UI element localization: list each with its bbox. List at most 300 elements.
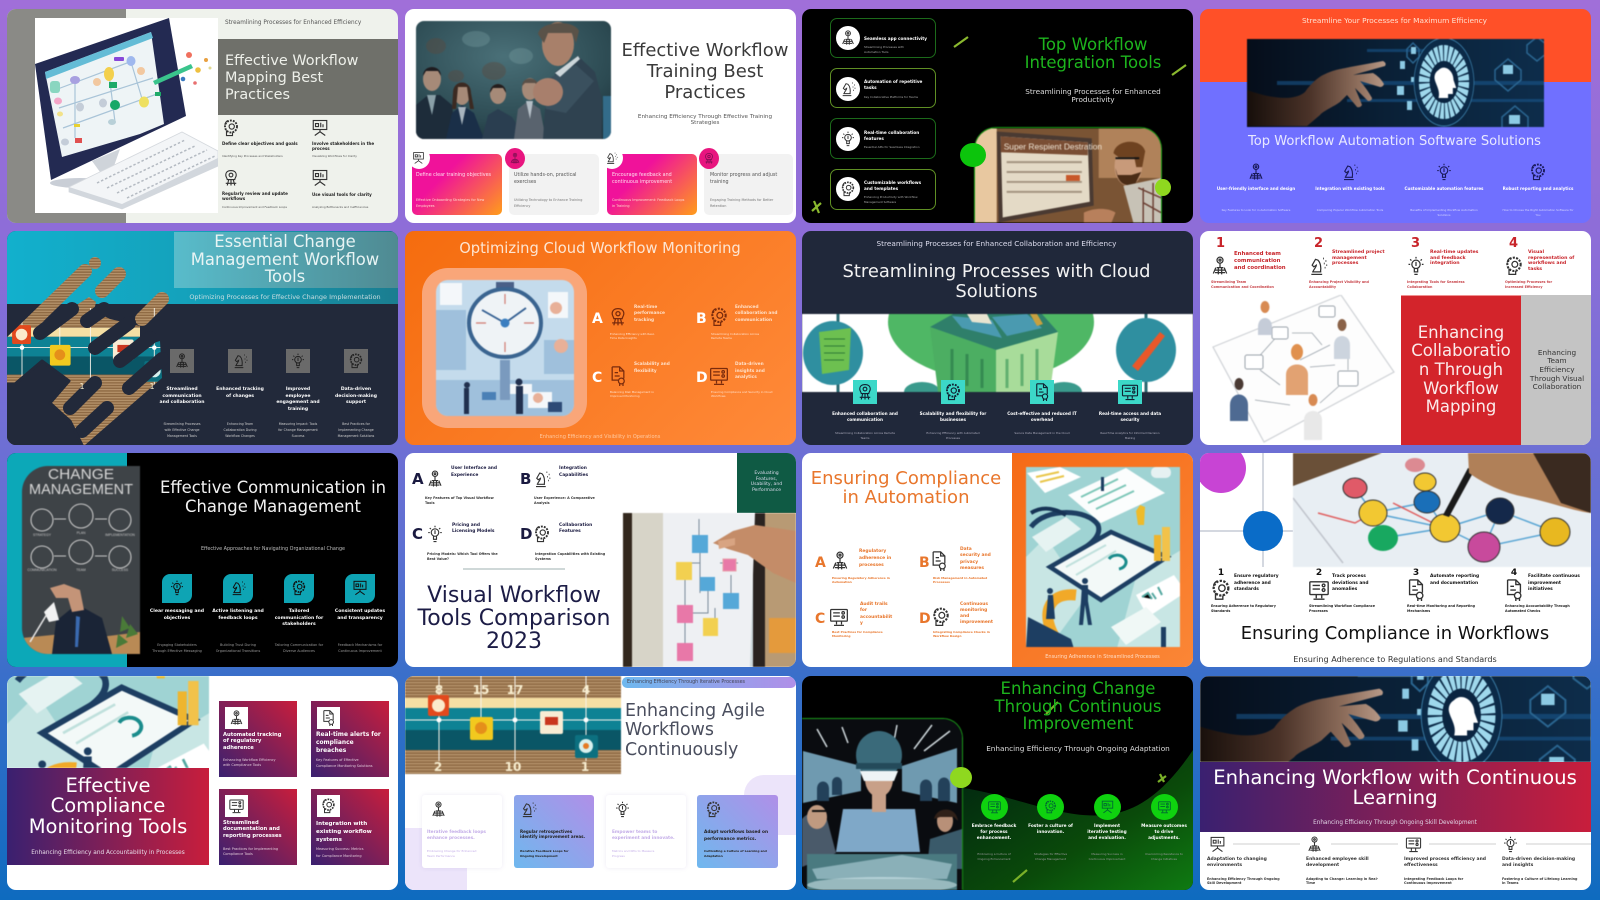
text: Measuring Success: Metrics	[316, 847, 364, 851]
icon: updates	[1406, 256, 1426, 276]
heading: communication: communication	[162, 394, 202, 398]
number 1: 1	[1218, 568, 1224, 578]
text: Iterative Feedback Loops for	[520, 849, 569, 853]
text: connectivity: Automation Tools	[864, 50, 888, 54]
text: stakeholders: Visualizing Workflows for Clarity	[312, 154, 357, 158]
icon: tailored	[284, 574, 314, 603]
gray side band	[7, 9, 126, 223]
text: Team Performance	[427, 854, 455, 858]
heading: feedback: Embrace feedback	[972, 824, 1016, 829]
letter A: A	[815, 555, 826, 571]
text: communication: Communication and Coordination	[1211, 284, 1274, 288]
text: efficiency: Integrating Feedback Loops for	[1404, 876, 1463, 880]
heading: cost: Cost-effective and reduced IT	[1007, 411, 1077, 416]
title: Integration Tools	[1025, 53, 1161, 72]
heading: outcomes: adjustments.	[1148, 836, 1180, 841]
text: customizable: Benefits of Implementing Workflow Automation	[1410, 208, 1478, 212]
icon: improvement	[1503, 579, 1525, 601]
text: Continuous Improvement: Feedback Loops	[612, 198, 684, 202]
text: messaging: Through Effective Messaging	[152, 649, 202, 653]
heading: security: security	[1120, 417, 1140, 422]
squiggle accent	[802, 676, 1193, 890]
panel: Enhancing Workflow with Continuous Learning	[1200, 676, 1591, 890]
illustration: timeline with tiles: 10	[505, 760, 521, 774]
heading: messaging	[147, 609, 207, 622]
heading	[427, 830, 486, 842]
photo: hand touching interface	[1200, 676, 1591, 762]
title: Enhancing Change	[1001, 679, 1155, 698]
text: updates	[330, 642, 390, 654]
heading: deviations: anomalies	[1332, 587, 1357, 592]
icon: communication	[170, 349, 194, 373]
illustration: workflow on a monitor	[35, 18, 218, 213]
card: monitor progress	[704, 154, 793, 215]
text: scalability	[903, 430, 1003, 440]
photo: change management chalkboard: PLAN	[77, 531, 86, 535]
text: collaboration	[535, 552, 605, 562]
text: visual tools: Analyzing Bottlenecks and Inefficiencies	[312, 205, 368, 209]
text: testing	[1077, 852, 1137, 862]
heading: listening	[208, 609, 268, 622]
text: monitoring	[933, 630, 990, 638]
text: project: Accountability	[1309, 284, 1336, 288]
header band	[1200, 9, 1591, 82]
heading: testing: Implement	[1094, 824, 1120, 829]
text: collaboration: Integration Capabilities with Existing	[535, 552, 605, 556]
heading	[612, 172, 672, 184]
text: regulatory	[1211, 604, 1276, 614]
heading: review	[222, 190, 288, 200]
heading: collaboration: communication	[735, 318, 772, 322]
text: adaptation: Enhancing Efficiency Through Ongoing	[1207, 876, 1280, 880]
text: visual: Optimizing Processes for	[1505, 280, 1552, 284]
title: Visual Workflow	[427, 582, 601, 608]
heading: security: security and	[960, 553, 991, 558]
heading: systems	[316, 837, 342, 843]
heading: reporting: Automate reporting	[1430, 574, 1479, 579]
panel: Ensuring Compliance in Workflows	[1200, 453, 1591, 667]
title	[225, 52, 358, 102]
divider	[463, 568, 565, 570]
heading: regulatory: processes	[859, 563, 884, 568]
text: tracking: Enhancing Team	[227, 422, 253, 426]
text: Ongoing Development	[520, 854, 558, 858]
text: improvement: Enhancing Accountability Through	[1505, 604, 1570, 608]
card: hands-on exercises	[509, 154, 599, 215]
heading: efficiency: Improved process efficiency and	[1404, 857, 1486, 862]
heading: Empower teams to	[612, 830, 657, 834]
text	[612, 198, 684, 208]
icon: engagement	[286, 349, 310, 373]
text: tailored	[269, 642, 329, 654]
heading: security: measures	[960, 566, 984, 571]
text: tailored: Diverse Audiences	[283, 649, 315, 653]
text: efficiency: Continuous Improvement	[1404, 881, 1452, 885]
icon: feedback	[980, 794, 1008, 820]
text: with Compliance Tools	[223, 762, 261, 766]
heading: improvement	[1528, 574, 1580, 594]
photo: hand drawing a process graph	[1293, 453, 1591, 567]
teal side band	[7, 453, 127, 667]
panel: Ensuring Compliance in Automation	[802, 453, 1193, 667]
text: reporting: Real-time Monitoring and Reporting	[1407, 604, 1475, 608]
heading: customizable: Customizable workflows	[864, 180, 921, 185]
text: Adaptation	[704, 854, 723, 858]
title: Effective	[65, 774, 151, 796]
letter A: A	[412, 470, 424, 488]
green caption block	[737, 453, 796, 513]
text: scalability: Balancing Risk Management in	[610, 390, 654, 394]
icon	[225, 707, 248, 729]
heading: exercises	[514, 180, 536, 184]
heading: connectivity: Seamless app connectivity	[864, 36, 927, 40]
heading: identify improvement areas.	[520, 834, 585, 839]
text: Best Practices for Implementing	[223, 846, 278, 850]
illustration: timeline with tiles: 15	[473, 683, 489, 697]
text: reporting	[1407, 604, 1475, 614]
text: feedback: Embracing a Culture of	[977, 852, 1011, 856]
text: security: Real-Time Analytics for Informed Decision	[1100, 430, 1160, 434]
title panel	[1200, 762, 1591, 832]
icon: insights	[1502, 836, 1519, 853]
heading: visual tools: Use visual tools for clarity	[312, 192, 372, 196]
title panel	[174, 232, 398, 288]
panel: Top Workflow Automation Software Solutions	[1200, 9, 1591, 223]
heading: stakeholders: process	[312, 146, 330, 150]
text: listening	[208, 642, 268, 654]
icon: badge white 2	[607, 152, 623, 169]
text: automation: Key Collaborative Platforms for Teams	[864, 94, 918, 98]
title: Effective Workflow	[225, 52, 358, 68]
panel: Essential Change Management Workflow Tools	[7, 231, 398, 445]
text: integration: Comparing Popular Workflow Automation Tools	[1317, 208, 1383, 212]
heading: efficiency	[1404, 857, 1486, 870]
text: listening: Building Trust During	[220, 643, 256, 647]
text: regulatory: Ensuring Regulatory Adherence in	[832, 576, 890, 580]
text: insights: Fostering a Culture of Lifelong Learning	[1502, 876, 1577, 880]
text: outcomes	[1134, 852, 1194, 862]
accent: lavender blob right	[744, 775, 796, 835]
caption: Evaluating	[754, 471, 779, 476]
text: tailored: Tailoring Communication for	[275, 643, 323, 647]
letter C: C	[592, 370, 602, 386]
panel: Effective Workflow Mapping Best Practices	[7, 9, 398, 223]
text: communication: with Effective Change	[165, 428, 199, 432]
icon: scalability	[941, 380, 965, 404]
heading: collaboration	[864, 130, 919, 141]
icon: efficiency	[1405, 836, 1422, 853]
subtitle: Enhancing Efficiency and Accountability in Processes	[31, 850, 185, 856]
icon: integration	[533, 470, 551, 488]
text: feedback	[964, 852, 1024, 862]
text: adaptation	[1207, 876, 1280, 886]
heading: tracking: of changes	[226, 394, 254, 398]
illustration: timeline with tiles: 8	[435, 683, 443, 697]
heading: reporting: Robust reporting and analytics	[1503, 186, 1573, 190]
heading: engagement: engagement and	[276, 400, 320, 405]
panel: Top Workflow Integration Tools	[802, 9, 1193, 223]
text: collaboration: Systems	[535, 556, 551, 560]
text: scalability: Improved Monitoring	[610, 394, 640, 398]
text: scalability: Processes	[946, 436, 960, 440]
title: Training Best	[647, 60, 763, 82]
card: experiment	[606, 795, 686, 868]
heading: collaboration: Features	[559, 529, 581, 534]
title: Enhancing Workflow with Continuous	[1213, 766, 1577, 789]
heading: adaptation	[1207, 857, 1267, 870]
letter D: D	[919, 611, 931, 627]
heading: collaboration: Collaboration	[559, 522, 592, 528]
heading: visual: workflows and	[1528, 261, 1566, 266]
number 1: 1	[1216, 236, 1225, 251]
subtitle: Productivity	[1071, 95, 1115, 104]
title	[978, 680, 1178, 732]
heading: scalability: Scalability and	[634, 362, 670, 367]
icon: updates	[345, 574, 375, 603]
heading: collaboration	[735, 304, 777, 324]
subtitle: Team	[1547, 356, 1567, 365]
card: automated tracking	[219, 701, 297, 777]
title: Monitoring Tools	[29, 815, 187, 838]
heading: decisions: decision-making	[335, 394, 377, 398]
text: decisions: Best Practices for	[342, 422, 370, 426]
letter A: A	[592, 311, 603, 327]
subtitle: Ensuring Adherence to Regulations and Standards	[1293, 654, 1497, 664]
card: documentation	[219, 789, 297, 865]
heading: tailored: Tailored	[289, 609, 309, 614]
photo: manager pointing at team	[415, 20, 612, 140]
heading: adaptation: Adaptation to changing	[1207, 857, 1267, 862]
text: visual: Increased Efficiency	[1505, 284, 1543, 288]
illustration: timeline with tiles: 1	[581, 760, 589, 774]
heading: updates	[1430, 250, 1478, 266]
heading: audit: Audit trails	[860, 602, 888, 607]
heading: objectives: Define clear objectives and goals	[222, 140, 298, 146]
heading: tracking: performance	[634, 311, 665, 316]
icon: messaging	[162, 574, 192, 603]
heading: improvement: improvement	[1528, 580, 1561, 586]
text: interface	[425, 496, 494, 506]
illustration: sketched team workflow	[1200, 295, 1401, 445]
heading: deviations: Track process	[1332, 574, 1366, 579]
text: insights: in Teams	[1502, 881, 1519, 885]
title: Workflows	[625, 720, 714, 740]
subtitle: Streamlining Processes for Enhanced Efficiency	[225, 20, 361, 26]
heading: regulatory	[1234, 574, 1279, 594]
heading: documentation and	[223, 826, 280, 832]
title: Enhancing	[1418, 322, 1504, 342]
heading: security	[1080, 411, 1180, 423]
text: collaboration	[815, 430, 915, 440]
title: Workflow	[1423, 379, 1499, 398]
heading: efficiency: effectiveness	[1404, 863, 1438, 868]
text: security: Making	[1125, 436, 1135, 440]
icon: communication	[1210, 256, 1230, 276]
text: deviations: Processes	[1309, 608, 1328, 612]
text: audit	[832, 630, 883, 638]
text	[612, 849, 654, 858]
heading: performance metrics.	[704, 837, 756, 842]
title: Essential Change	[214, 232, 356, 251]
heading: engagement: Improved	[286, 387, 310, 392]
subtitle: Enhancing	[1538, 348, 1576, 356]
text: Progress	[612, 854, 625, 858]
text: updates: Integrating Tools for Seamless	[1407, 280, 1465, 284]
text: Compliance Monitoring Solutions	[316, 764, 373, 768]
icon: connectivity	[836, 26, 860, 50]
text: efficiency	[1404, 876, 1463, 886]
heading: collaboration: features	[864, 136, 884, 141]
heading: customizable: and templates	[864, 186, 898, 191]
icon: analytics	[709, 366, 729, 386]
panel: Streamlining Processes with Cloud Solutions	[802, 231, 1193, 445]
subtitle	[1521, 348, 1593, 392]
heading: deviations	[1332, 574, 1369, 594]
text: tracking	[610, 332, 655, 340]
caption: Enhancing Efficiency Through Iterative Processes	[627, 680, 745, 684]
text	[316, 846, 364, 860]
heading: communication: communication	[1234, 258, 1280, 264]
heading: collaboration	[815, 411, 915, 423]
panel: Effective Compliance Monitoring Tools	[7, 676, 398, 890]
text: Effective Onboarding Strategies for New	[416, 198, 484, 202]
heading: cost	[992, 411, 1092, 423]
photo: woman with visor and team	[802, 718, 963, 890]
accent: lavender blob left	[405, 828, 467, 890]
heading: visual: Visual	[1528, 250, 1544, 255]
icon: customizable	[1437, 164, 1451, 180]
text: testing: Continuous Improvement	[1089, 857, 1125, 861]
title: Learning	[1352, 786, 1438, 809]
text: interface: Tools	[425, 500, 435, 504]
illustration: clock and dashboards	[436, 280, 574, 416]
text: tracking: Time Data Insights	[610, 336, 637, 340]
text: messaging	[147, 642, 207, 654]
icon: customizable	[836, 177, 860, 201]
heading: review: Regularly review and update	[222, 190, 288, 196]
icon: cost	[1030, 380, 1054, 404]
heading: visual: tasks	[1528, 266, 1542, 272]
text: customizable	[1410, 208, 1478, 217]
heading	[223, 820, 282, 839]
box: customizable	[830, 169, 936, 210]
subtitle	[638, 114, 772, 126]
heading: audit: y	[860, 621, 863, 626]
heading: feedback	[964, 824, 1024, 842]
icon: reporting	[1405, 579, 1427, 601]
heading: innovation: Foster a culture of	[1028, 824, 1073, 829]
heading: regulatory: standards	[1234, 587, 1259, 592]
heading: continuous improvement	[612, 180, 672, 184]
text: analytics	[711, 390, 772, 398]
text: decisions: Implementing Change	[338, 428, 374, 432]
text: project: Enhancing Project Visibility and	[1309, 280, 1369, 284]
heading: collaboration: communication	[847, 417, 883, 422]
title	[802, 262, 1191, 301]
image frame	[422, 268, 587, 428]
heading: tracking: Real-time	[634, 304, 657, 310]
heading: Regular retrospectives	[520, 828, 572, 834]
number 3: 3	[1413, 568, 1419, 578]
footer caption: Enhancing Efficiency and Visibility in Operations	[540, 434, 660, 440]
text: updates: Continuous Improvement	[338, 649, 382, 653]
heading	[612, 830, 675, 842]
icon: pricing	[426, 525, 444, 543]
title: Top Workflow Automation Software Solutions	[1248, 134, 1541, 149]
heading: listening: feedback loops	[218, 616, 258, 620]
heading: experiment and innovate.	[612, 836, 675, 841]
title	[174, 233, 396, 286]
heading: updates: and transparency	[337, 616, 383, 620]
text: updates: Collaboration	[1407, 284, 1432, 288]
text: for Compliance Monitoring	[316, 854, 362, 858]
gray subtitle block	[1521, 295, 1591, 445]
heading: tailored	[269, 609, 329, 628]
title: Ensuring Compliance	[811, 468, 1001, 488]
text: updates: Feedback Mechanisms for	[338, 643, 382, 647]
heading: messaging: Clear messaging and	[150, 609, 204, 614]
text: integration: Analysis	[534, 500, 550, 504]
text: listening: Organizational Transitions	[216, 649, 260, 653]
title: Mapping Best	[225, 70, 323, 86]
icon: security	[1118, 380, 1142, 404]
heading: scalability: Scalability and flexibility for	[920, 411, 986, 416]
subtitle: Enhancing Efficiency Through Effective Training	[638, 114, 772, 120]
photo: change management chalkboard: CHANGE	[48, 467, 114, 483]
text: testing: Measuring Success in	[1091, 852, 1123, 856]
photo: analyst at a monitor	[974, 127, 1162, 223]
illustration: timeline with tiles	[405, 676, 621, 774]
text: engagement: Success	[292, 434, 304, 438]
heading: compliance	[316, 740, 354, 746]
icon: reporting	[1531, 164, 1545, 180]
text: improvement	[1505, 604, 1570, 614]
text: Metrics and KPIs to Measure	[612, 849, 654, 853]
icon	[430, 801, 447, 818]
title	[1025, 35, 1161, 72]
text	[416, 198, 484, 208]
text: skills	[1306, 876, 1378, 886]
heading: testing: and evaluation.	[1088, 836, 1126, 841]
text: skills: Time	[1306, 881, 1315, 885]
icon: collaboration	[709, 307, 729, 327]
heading: communication: and collaboration	[160, 400, 204, 405]
text: feedback: Ongoing Enhancement	[977, 857, 1011, 861]
icon: tracking	[608, 307, 628, 327]
text	[710, 198, 774, 208]
icon: review	[225, 170, 237, 186]
heading: decisions	[326, 387, 386, 406]
text: scalability	[610, 390, 654, 398]
heading: feedback: for process	[980, 830, 1008, 835]
text: reporting: You	[1536, 213, 1540, 217]
text: review: Continuous Improvement and Feedback Loops	[222, 205, 287, 209]
orange image panel	[1012, 453, 1193, 667]
caption: Usability, and	[751, 482, 782, 487]
card: feedback loops	[422, 795, 502, 868]
panel: Effective Communication in Change Management	[7, 453, 398, 667]
panel: Effective Workflow Training Best Practices	[405, 9, 796, 223]
heading: regulatory: adherence and	[1234, 580, 1271, 586]
text: regulatory	[832, 576, 890, 584]
heading: updates: Real-time updates	[1430, 250, 1478, 255]
heading: communication: Streamlined	[166, 387, 198, 392]
letter C: C	[815, 611, 825, 627]
photo: change management chalkboard: MANAGEMENT	[29, 482, 133, 498]
heading: improvement: initiatives	[1528, 587, 1553, 592]
heading: tailored: stakeholders	[282, 622, 316, 627]
heading: Utilize hands-on, practical	[514, 173, 577, 178]
